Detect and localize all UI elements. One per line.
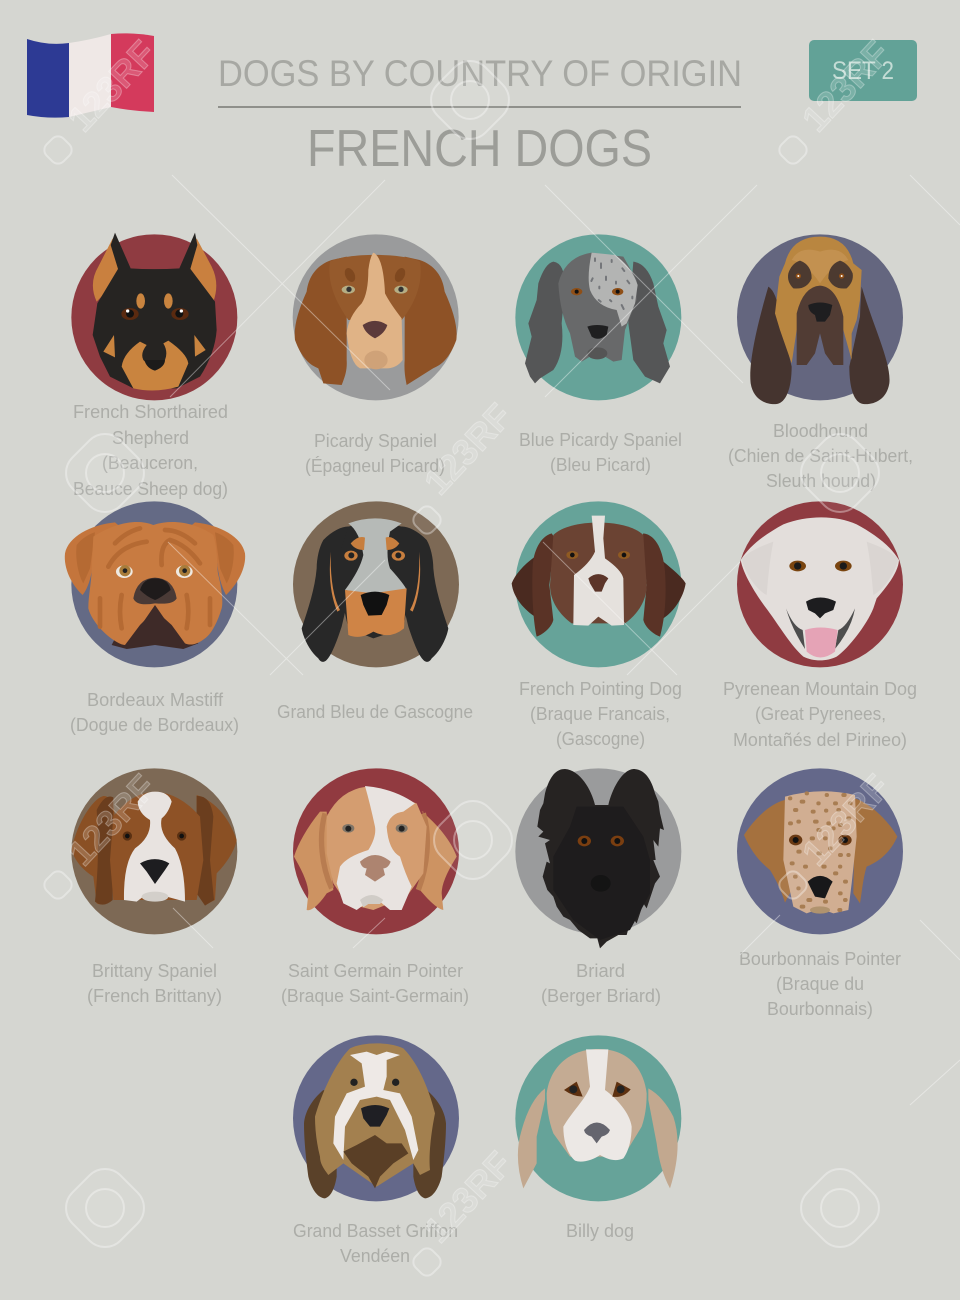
label: Pyrenean Mountain Dog: Pyrenean Mountain Dog — [723, 679, 917, 699]
label: French Pointing Dog — [519, 679, 682, 749]
label: Blue Picardy Spaniel — [519, 430, 682, 475]
icon: Grand Bleu de Gascogne — [293, 501, 459, 667]
label: Bourbonnais Pointer — [739, 949, 901, 1019]
subtitle: FRENCH DOGS — [307, 120, 652, 178]
icon: Bloodhound — [737, 234, 903, 404]
label: Grand Basset Griffon Vendéen: Vendéen — [340, 1246, 410, 1266]
label: Pyrenean Mountain Dog: Montañés del Pirineo) — [733, 730, 907, 750]
label: Brittany Spaniel: Brittany Spaniel — [92, 961, 217, 981]
label: Picardy Spaniel: (Épagneul Picard) — [305, 456, 445, 476]
label: French Pointing Dog: (Braque Francais, — [530, 704, 670, 724]
label: French Pointing Dog: French Pointing Dog — [519, 679, 682, 699]
watermark: 123RF — [416, 395, 520, 502]
label: French Pointing Dog: (Gascogne) — [556, 729, 645, 749]
label: Briard — [541, 961, 661, 1006]
label: Pyrenean Mountain Dog: (Great Pyrenees, — [755, 704, 886, 724]
watermark: 123RF — [794, 32, 898, 139]
label: French Shorthaired Shepherd: Beauce Sheep dog) — [73, 479, 228, 499]
label: Brittany Spaniel — [87, 961, 222, 1006]
label: French Shorthaired Shepherd: French Shorthaired — [73, 402, 228, 422]
label: Brittany Spaniel: (French Brittany) — [87, 986, 222, 1006]
icon: Briard — [515, 768, 681, 948]
label: Bourbonnais Pointer: Bourbonnais) — [767, 999, 873, 1019]
icon: French Pointing Dog — [512, 501, 686, 667]
label: Briard: (Berger Briard) — [541, 986, 661, 1006]
label: Picardy Spaniel: Picardy Spaniel — [314, 431, 437, 451]
icon: Bordeaux Mastiff — [65, 501, 245, 667]
label: Saint Germain Pointer: Saint Germain Pointer — [288, 961, 463, 981]
label: Bloodhound — [728, 421, 913, 491]
watermark: 123RF — [60, 32, 164, 139]
watermark: 123RF — [416, 1143, 520, 1250]
label: Grand Bleu de Gascogne: Grand Bleu de Gascogne — [277, 702, 473, 722]
label: French Shorthaired Shepherd — [73, 402, 228, 499]
icon: Blue Picardy Spaniel — [515, 234, 681, 400]
label: Bordeaux Mastiff: (Dogue de Bordeaux) — [70, 715, 239, 735]
label: French Shorthaired Shepherd: Shepherd — [112, 428, 189, 448]
label: Grand Basset Griffon Vendéen — [293, 1221, 458, 1266]
label: Picardy Spaniel — [305, 431, 445, 476]
icon: French Shorthaired Shepherd — [71, 233, 237, 400]
watermark: 123RF — [794, 766, 898, 873]
icon: Pyrenean Mountain Dog — [737, 501, 903, 667]
set badge — [809, 40, 917, 101]
label: French Shorthaired Shepherd: (Beauceron, — [102, 453, 198, 473]
icon: Picardy Spaniel — [293, 234, 459, 400]
icon: Billy dog — [515, 1035, 681, 1201]
icon: Brittany Spaniel — [71, 768, 237, 934]
label: Bordeaux Mastiff — [70, 690, 239, 735]
label: Saint Germain Pointer — [281, 961, 469, 1006]
set badge: SET 2 — [832, 57, 894, 85]
label: Bloodhound: (Chien de Saint-Hubert, — [728, 446, 913, 466]
label: Bordeaux Mastiff: Bordeaux Mastiff — [87, 690, 224, 710]
label: Billy dog: Billy dog — [566, 1221, 634, 1241]
label: Briard: Briard — [576, 961, 625, 981]
label: Bloodhound: Sleuth hound) — [766, 471, 876, 491]
icon: Bourbonnais Pointer — [737, 768, 903, 934]
icon: Saint Germain Pointer — [293, 768, 459, 934]
header: flag — [27, 33, 154, 118]
watermark: 123RF — [60, 766, 164, 873]
title: DOGS BY COUNTRY OF ORIGIN — [218, 53, 742, 94]
label: Blue Picardy Spaniel: Blue Picardy Spaniel — [519, 430, 682, 450]
label: Pyrenean Mountain Dog — [723, 679, 917, 750]
label: Bourbonnais Pointer: (Braque du — [776, 974, 864, 994]
label: Blue Picardy Spaniel: (Bleu Picard) — [550, 455, 651, 475]
label: Saint Germain Pointer: (Braque Saint-Germain) — [281, 986, 469, 1006]
label: Bloodhound: Bloodhound — [773, 421, 868, 441]
icon: Grand Basset Griffon Vendéen — [293, 1035, 459, 1201]
label: Bourbonnais Pointer: Bourbonnais Pointer — [739, 949, 901, 969]
label: Grand Basset Griffon Vendéen: Grand Basset Griffon — [293, 1221, 458, 1241]
